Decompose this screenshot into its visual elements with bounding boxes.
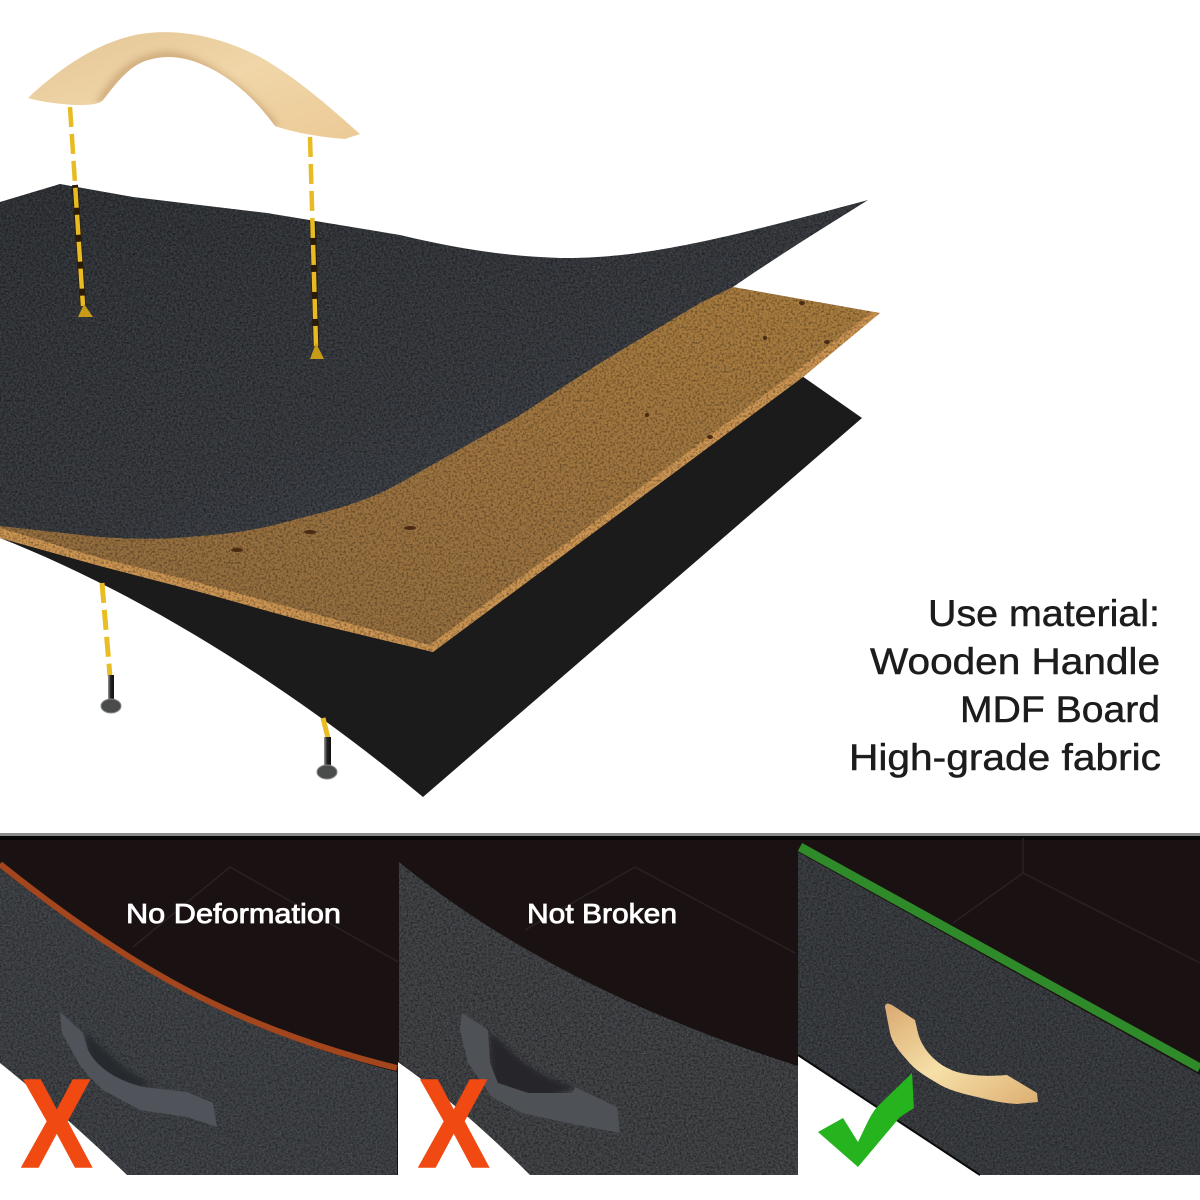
- text block: material list: [849, 593, 1161, 778]
- label: not broken: Not Broken: [527, 898, 677, 929]
- layer: MDF board: [0, 280, 890, 660]
- board edge: [0, 312, 880, 652]
- broken fabric handle: [460, 1013, 620, 1133]
- wooden handle: [885, 1004, 1038, 1104]
- bent fabric handle: [60, 1012, 217, 1127]
- icon: wooden arch handle: [28, 32, 360, 139]
- text block: material list: MDF Board: [960, 689, 1160, 730]
- icon: lower right screw and guide line: [317, 718, 337, 779]
- icon: right handle guide line: [310, 137, 324, 359]
- layer: top linen fabric: [0, 180, 880, 545]
- orange X mark: X: [21, 1053, 92, 1194]
- orange rim: [0, 864, 397, 1068]
- white corner: [398, 1062, 530, 1175]
- text block: material list: Wooden Handle: [870, 641, 1160, 682]
- panel: correct wooden handle: [798, 833, 1200, 1175]
- icon: lower left screw and guide line: [101, 583, 121, 713]
- text block: material list: Use material:: [928, 593, 1160, 634]
- fabric bin wall: [398, 860, 800, 1175]
- fabric bin wall: [0, 860, 400, 1175]
- icon: left handle guide line: [70, 107, 93, 317]
- white corner: [798, 1055, 980, 1175]
- layer: black backing fabric sheet: [0, 376, 862, 797]
- fabric bin wall: [798, 845, 1200, 1175]
- white corner: [0, 1063, 127, 1175]
- green rim: [800, 847, 1200, 1068]
- panel: not broken comparison: [398, 833, 800, 1194]
- text block: material list: High-grade fabric: [849, 737, 1161, 778]
- orange X mark: X: [418, 1053, 489, 1194]
- board flecks: [231, 301, 830, 552]
- label: no deformation: No Deformation: [126, 898, 341, 929]
- panel: no deformation comparison: [0, 833, 400, 1194]
- green check mark: [818, 1073, 914, 1167]
- panel: exploded material layers: [0, 32, 890, 797]
